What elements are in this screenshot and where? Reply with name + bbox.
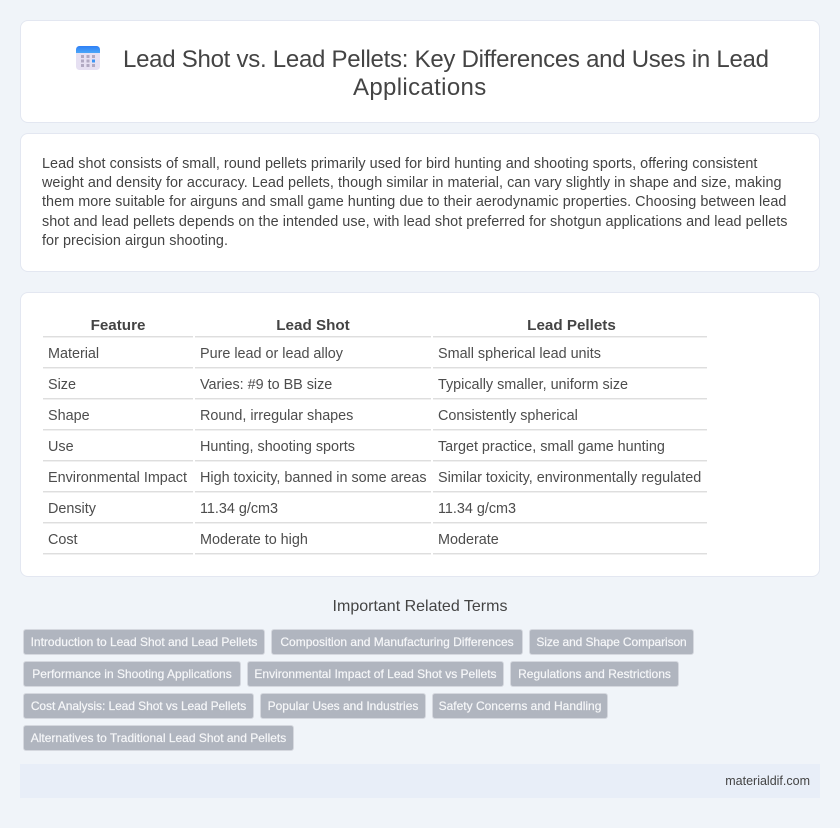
table: Consistently spherical	[438, 408, 578, 424]
table header: Lead Pellets	[527, 317, 616, 334]
row: material: Material	[48, 346, 99, 362]
title: Applications	[353, 74, 487, 101]
header card	[20, 20, 820, 123]
title: Lead Shot vs. Lead Pellets: Key Differences and Uses in Lead	[123, 46, 769, 73]
related terms tags: Performance in Shooting Applications	[32, 667, 232, 681]
footer	[20, 764, 820, 798]
intro paragraph: weight and density for accuracy. Lead pellets, though similar in material, can vary slightly in shape and size, making	[42, 174, 782, 190]
row: environmental impact: Environmental Impact	[48, 470, 187, 486]
related terms tags: Size and Shape Comparison	[536, 635, 687, 649]
footer source: materialdif.com	[725, 774, 810, 788]
table: Target practice, small game hunting	[438, 439, 665, 455]
related terms tags: Introduction to Lead Shot and Lead Pellets	[31, 635, 257, 649]
table: Moderate to high	[200, 532, 308, 548]
table: Similar toxicity, environmentally regulated	[438, 470, 701, 486]
title	[123, 46, 769, 101]
intro paragraph	[42, 156, 788, 249]
table	[43, 317, 707, 555]
related terms tags: Regulations and Restrictions	[518, 667, 671, 681]
related terms tags: Environmental Impact of Lead Shot vs Pellets	[254, 667, 497, 681]
intro paragraph: for precision airgun shooting.	[42, 233, 228, 249]
related terms tags: Composition and Manufacturing Differences	[280, 635, 514, 649]
table: Typically smaller, uniform size	[438, 377, 628, 393]
intro panel	[20, 133, 820, 272]
icon: calendar	[76, 46, 100, 70]
table header	[91, 317, 616, 334]
table: Pure lead or lead alloy	[200, 346, 343, 362]
table: Small spherical lead units	[438, 346, 601, 362]
table: 11.34 g/cm3	[438, 501, 516, 517]
related terms tags: Popular Uses and Industries	[268, 699, 418, 713]
intro paragraph: them more suitable for airguns and small game hunting due to their aerodynamic properties. Choosing between lead	[42, 194, 786, 210]
related terms tags: Alternatives to Traditional Lead Shot and Pellets	[31, 731, 286, 745]
table: Moderate	[438, 532, 499, 548]
intro paragraph: Lead shot consists of small, round pellets primarily used for bird hunting and shooting sports, offering consistent	[42, 156, 757, 172]
table header: Feature	[91, 317, 145, 334]
related terms heading: Important Related Terms	[333, 598, 507, 615]
table: Varies: #9 to BB size	[200, 377, 332, 393]
row: density: Density	[48, 501, 96, 517]
table: Hunting, shooting sports	[200, 439, 355, 455]
table header: Lead Shot	[276, 317, 350, 334]
related terms tags	[23, 629, 694, 751]
intro paragraph: shot and lead pellets depends on the intended use, with lead shot preferred for shotgun applications and lead pellets	[42, 214, 788, 230]
row: size: Size	[48, 377, 76, 393]
table: Round, irregular shapes	[200, 408, 353, 424]
row: shape: Shape	[48, 408, 90, 424]
related terms tags: Cost Analysis: Lead Shot vs Lead Pellets	[31, 699, 246, 713]
related terms tags: Safety Concerns and Handling	[439, 699, 601, 713]
comparison table panel	[20, 292, 820, 577]
table: High toxicity, banned in some areas	[200, 470, 427, 486]
row: cost: Cost	[48, 532, 78, 548]
table: 11.34 g/cm3	[200, 501, 278, 517]
row: use: Use	[48, 439, 74, 455]
